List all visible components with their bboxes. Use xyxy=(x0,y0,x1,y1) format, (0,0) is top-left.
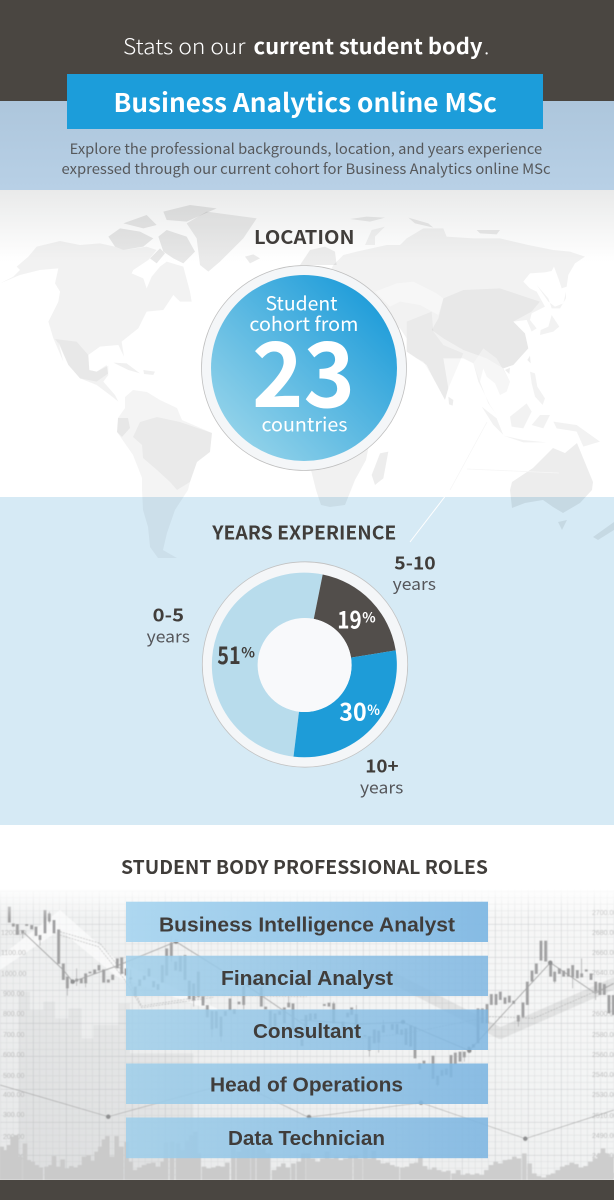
trend lines xyxy=(0,931,307,1117)
segment: 0-5 years 51% xyxy=(212,573,323,757)
role: Head of Operations xyxy=(126,1064,488,1104)
header band xyxy=(0,0,614,101)
heading: stats on our current student body: Stats on our xyxy=(123,31,246,61)
axis labels right xyxy=(592,910,614,1180)
role: Consultant: Consultant xyxy=(253,1021,361,1043)
intro text: expressed through our current cohort for Business Analytics online MSc xyxy=(62,159,550,179)
segment: 5-10 years 19% xyxy=(314,574,396,658)
axis labels left xyxy=(1,930,26,1180)
value: 51%: % xyxy=(241,643,256,663)
years experience panel background xyxy=(0,497,614,825)
axis labels left: 100.00 xyxy=(3,1154,25,1161)
label: 10+ years: 10+ xyxy=(365,753,399,779)
donut chart xyxy=(202,562,408,767)
role: Financial Analyst: Financial Analyst xyxy=(221,968,393,990)
heading: stats on our current student body: current student body xyxy=(254,31,482,61)
location circle: 23 xyxy=(252,303,355,433)
label: 10+ years xyxy=(360,753,404,798)
axis labels left: 0.00 xyxy=(8,1173,22,1180)
title banner xyxy=(67,74,543,129)
label: 5-10 years xyxy=(393,549,436,595)
location circle xyxy=(202,266,406,470)
footer band xyxy=(0,1180,614,1200)
intro band xyxy=(0,101,614,190)
value: 30%: % xyxy=(367,700,380,720)
intro text: Explore the professional backgrounds, location, and years experience xyxy=(70,139,542,159)
location panel background xyxy=(0,190,614,262)
heading: stats on our current student body xyxy=(123,31,489,61)
label: 5-10 years: 5-10 xyxy=(394,549,436,575)
label: 0-5 years: 0-5 xyxy=(153,602,184,628)
volume bars xyxy=(2,1132,303,1180)
location circle: countries xyxy=(262,409,348,438)
chart top fade xyxy=(0,886,614,918)
axis labels left: 700.00 xyxy=(3,1032,25,1039)
role: Data Technician xyxy=(126,1118,488,1158)
location circle: Student xyxy=(266,288,338,317)
axis labels left: 500.00 xyxy=(3,1073,25,1080)
label: 0-5 years: years xyxy=(147,624,190,648)
role: Business Intelligence Analyst: Business Intelligence Analyst xyxy=(159,915,455,937)
value: 19%: % xyxy=(362,608,376,628)
trend markers xyxy=(70,939,553,1141)
candlesticks left xyxy=(9,907,306,1046)
donut hole xyxy=(258,618,352,712)
axis labels left: 1000.00 xyxy=(1,971,26,978)
axis labels left: 900.00 xyxy=(3,991,25,998)
label: 5-10 years: years xyxy=(393,571,436,595)
axis labels left: 400.00 xyxy=(3,1092,25,1099)
axis labels left: 200.00 xyxy=(3,1134,25,1141)
heading: student body professional roles: STUDENT BODY PROFESSIONAL ROLES xyxy=(121,853,488,880)
role: Business Intelligence Analyst xyxy=(126,902,488,942)
role: Financial Analyst xyxy=(126,956,488,996)
value: 30% xyxy=(339,693,380,728)
heading: stats on our current student body: . xyxy=(484,31,489,61)
value: 51%: 51 xyxy=(217,636,241,671)
role: Consultant xyxy=(126,1010,488,1050)
stock chart background xyxy=(0,886,614,1180)
segment: 10+ years 30% xyxy=(294,650,397,757)
label: 10+ years: years xyxy=(360,774,404,798)
axis labels left: 300.00 xyxy=(3,1112,25,1119)
value: 30%: 30 xyxy=(339,693,367,728)
value: 19%: 19 xyxy=(337,600,362,635)
title banner: Business Analytics online MSc xyxy=(114,83,497,120)
intro text xyxy=(62,139,550,179)
role: Head of Operations: Head of Operations xyxy=(210,1075,403,1097)
label: 0-5 years xyxy=(147,602,190,648)
heading: years experience: YEARS EXPERIENCE xyxy=(211,518,396,545)
role: Data Technician: Data Technician xyxy=(228,1128,385,1150)
axis labels left: 800.00 xyxy=(3,1011,25,1018)
axis labels left: 600.00 xyxy=(3,1052,25,1059)
candlesticks right xyxy=(310,941,613,1087)
world map xyxy=(0,205,614,558)
location circle: cohort from xyxy=(249,308,358,337)
axis labels left: 1200.00 xyxy=(1,930,26,937)
axis labels left: 1100.00 xyxy=(1,950,26,957)
heading: location: LOCATION xyxy=(254,223,354,250)
